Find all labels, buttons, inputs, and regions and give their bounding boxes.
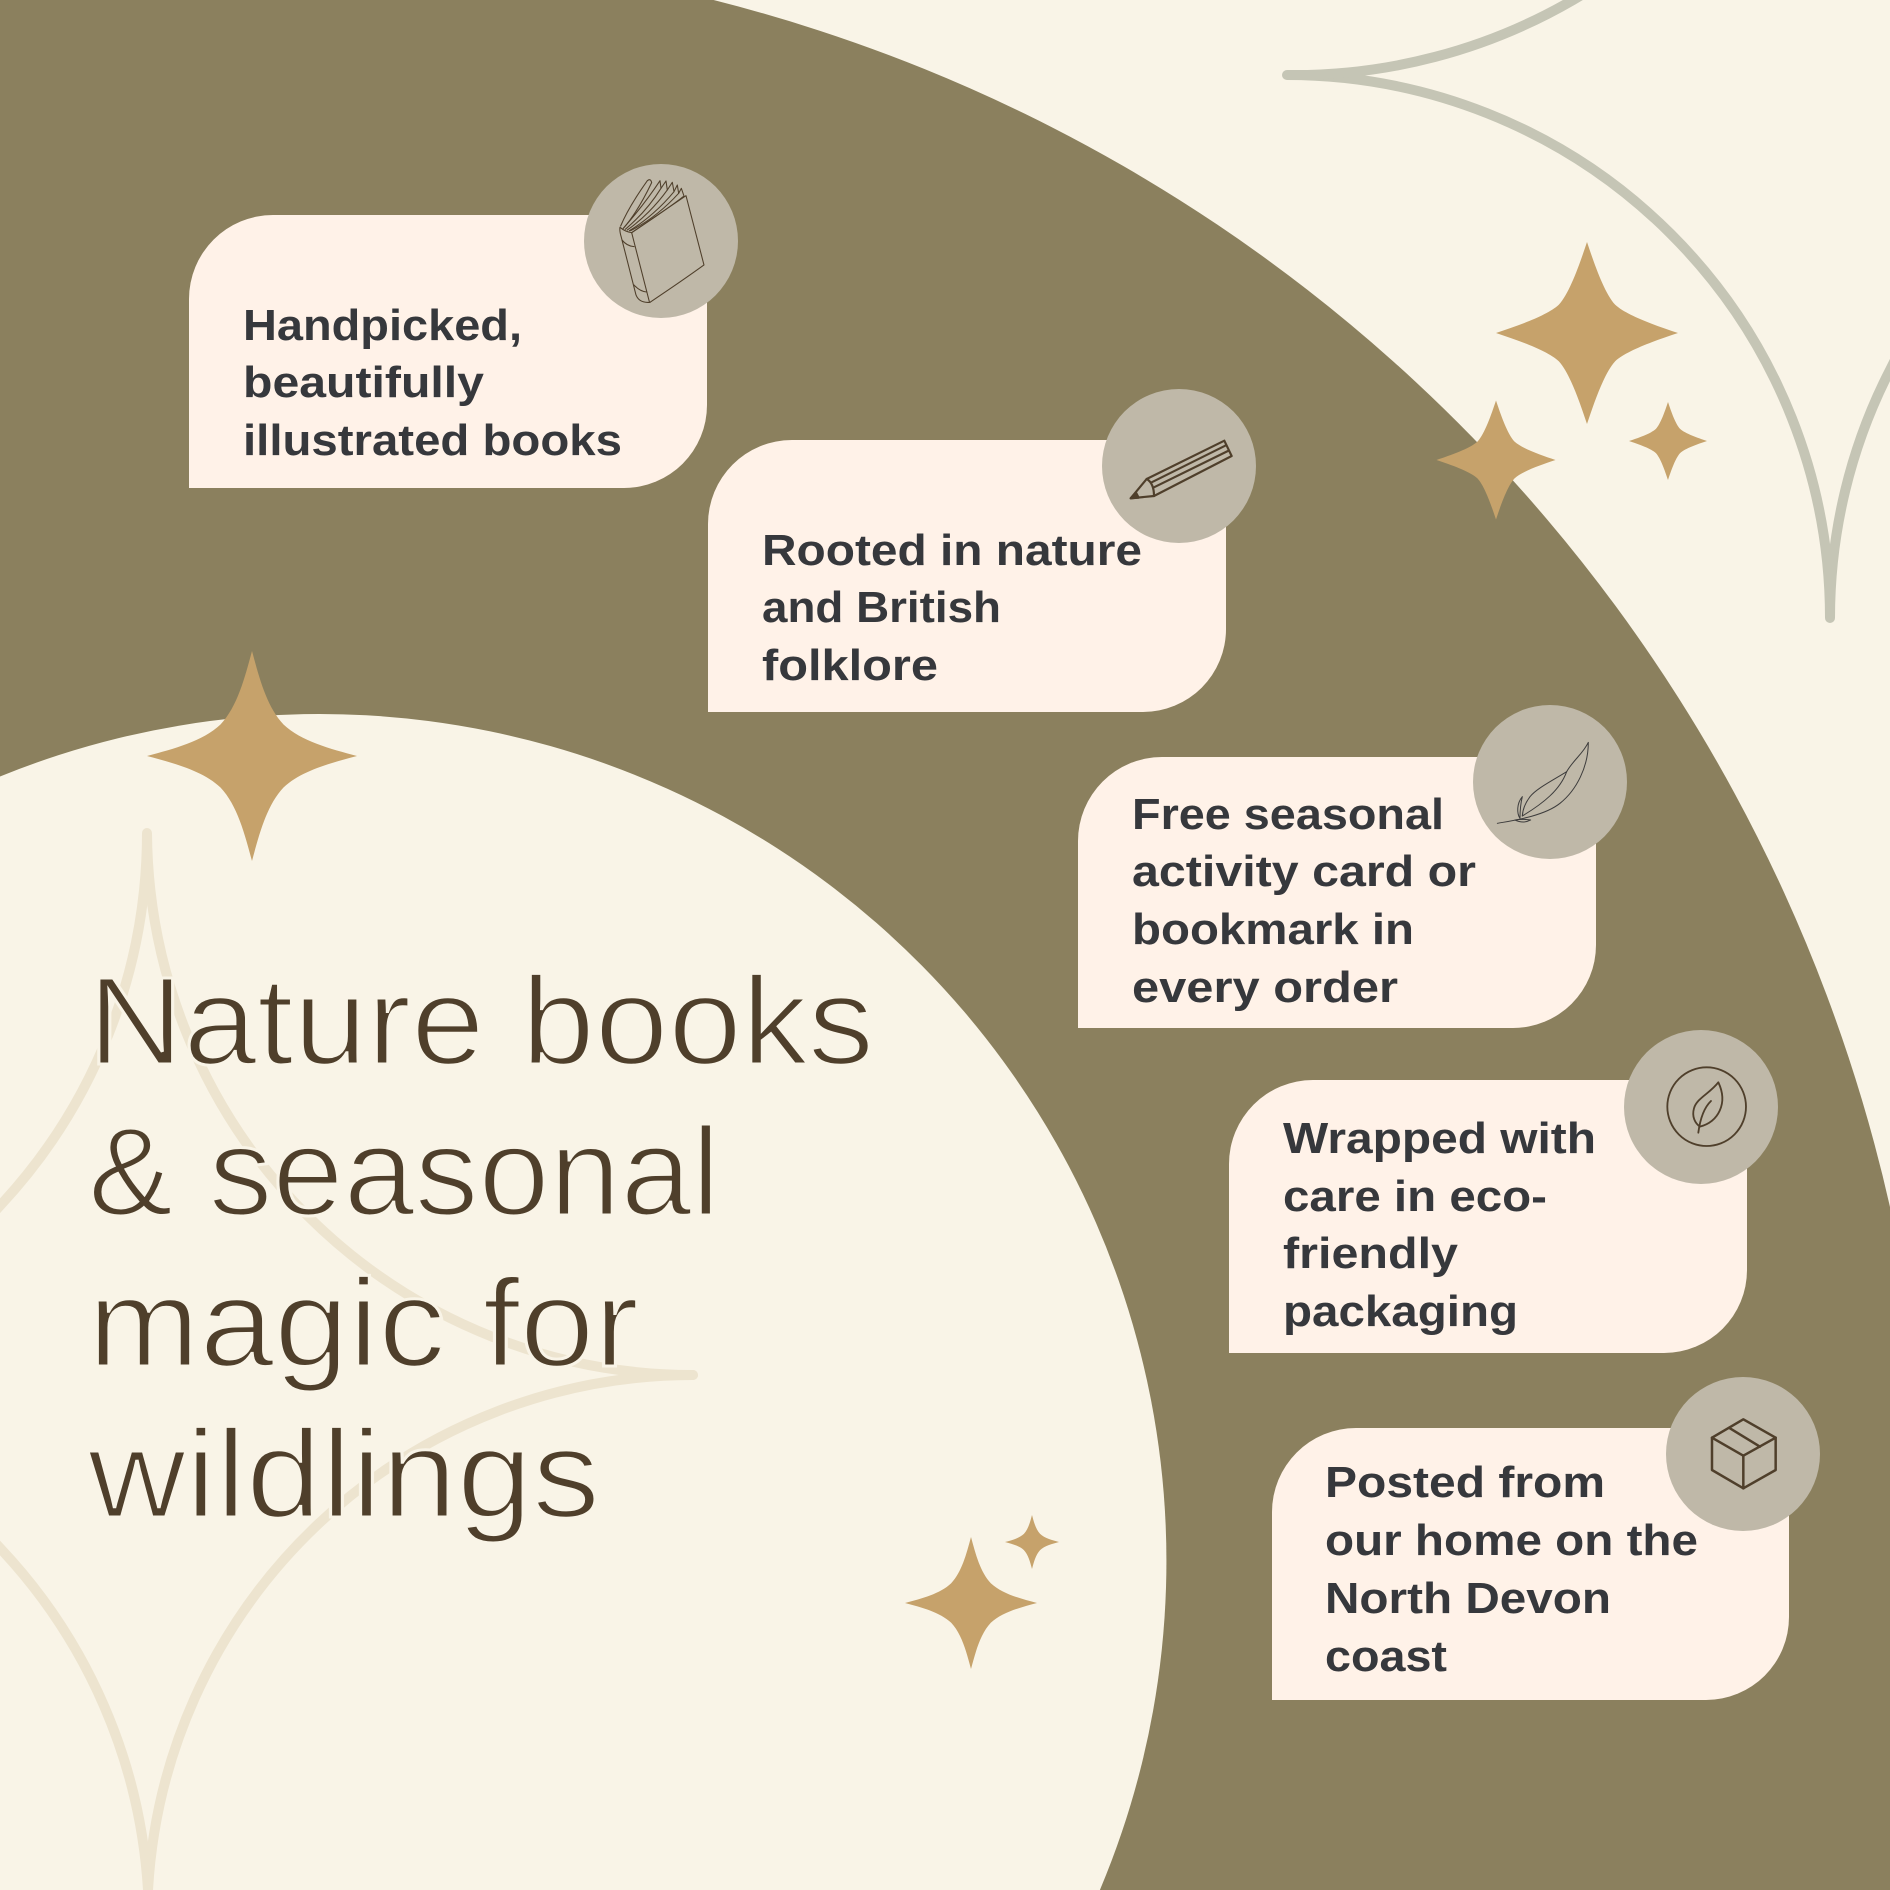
sparkles: bottom centre group	[905, 1515, 1059, 1669]
card 2 text: Rooted in nature	[762, 526, 1142, 575]
title: Nature books	[88, 952, 874, 1091]
card 4 text: friendly	[1283, 1229, 1459, 1278]
card 5 text: our home on the	[1325, 1516, 1698, 1565]
card 2: nature and folklore	[708, 389, 1256, 712]
decorative outline star: bottom left	[0, 833, 693, 1890]
card 4 text	[1283, 1114, 1596, 1336]
card 3 text: every order	[1132, 963, 1398, 1012]
sparkle: above heading	[147, 651, 357, 861]
title: magic for	[88, 1254, 639, 1393]
icon: feather	[1473, 705, 1627, 859]
card 5 text	[1325, 1458, 1698, 1681]
card 3: free seasonal extras	[1078, 705, 1627, 1028]
decorative outline star: top right	[1287, 0, 1890, 618]
title: wildlings	[87, 1405, 600, 1544]
icon: parcel box	[1666, 1377, 1820, 1531]
icon: leaf in circle	[1624, 1030, 1778, 1184]
sparkles: top right group	[1436, 242, 1707, 520]
card 1 text: illustrated books	[243, 416, 622, 465]
card 5 text: Posted from	[1325, 1458, 1605, 1507]
icon: book	[584, 164, 738, 318]
card 2 text: folklore	[762, 641, 938, 690]
card 4 text: packaging	[1283, 1287, 1518, 1336]
card 4: eco-friendly packaging	[1229, 1030, 1778, 1353]
card 1 text	[243, 301, 622, 465]
card 4 text: Wrapped with	[1283, 1114, 1596, 1163]
card 1: handpicked books	[189, 164, 738, 488]
inner cream circle	[0, 714, 1166, 1890]
card 5 text: coast	[1325, 1632, 1447, 1681]
card 1 text: beautifully	[243, 358, 485, 407]
card 2 text	[762, 526, 1142, 690]
card 1 text: Handpicked,	[243, 301, 522, 350]
card 4 text: care in eco-	[1283, 1172, 1547, 1221]
title	[87, 952, 874, 1544]
title: & seasonal	[88, 1103, 720, 1242]
card 5 text: North Devon	[1325, 1574, 1611, 1623]
icon: pencil	[1102, 389, 1256, 543]
card 3 text	[1132, 790, 1476, 1012]
card 3 text: Free seasonal	[1132, 790, 1444, 839]
card 3 text: activity card or	[1132, 847, 1476, 896]
card 2 text: and British	[762, 583, 1001, 632]
card 3 text: bookmark in	[1132, 905, 1414, 954]
card 5: posted from north devon	[1272, 1377, 1820, 1700]
